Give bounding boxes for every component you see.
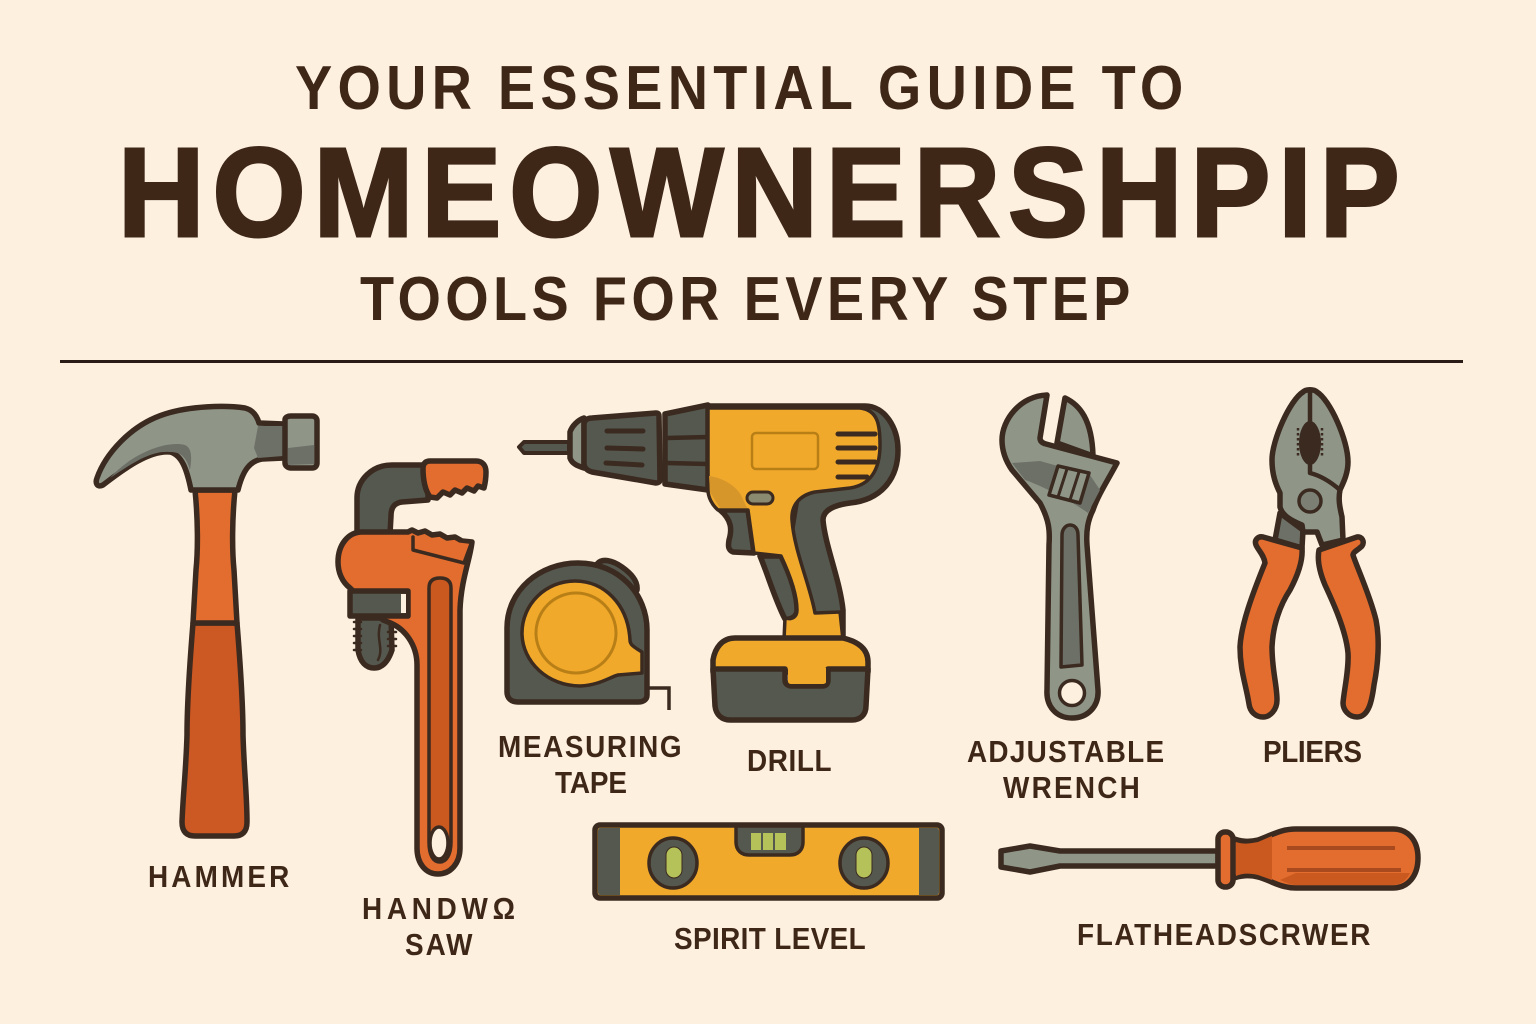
hammer head xyxy=(96,406,284,490)
icon: cordless drill xyxy=(519,405,898,720)
handle hole xyxy=(430,827,448,859)
icon: hammer xyxy=(96,406,317,836)
label line two: WRENCH xyxy=(1003,771,1140,805)
chuck nose xyxy=(570,418,584,468)
drill rear housing and grip xyxy=(708,406,898,640)
screwdriver shaft xyxy=(1001,846,1218,872)
chuck xyxy=(584,413,660,483)
heading: homeownershpip: HOMEOWNERSHPIP xyxy=(118,123,1400,264)
label: adjustable wrench xyxy=(967,735,1164,805)
hammer lower grip xyxy=(182,623,247,836)
drill vents xyxy=(838,434,875,477)
tape case xyxy=(507,563,647,702)
battery base xyxy=(713,669,868,720)
icon: spirit level xyxy=(595,825,942,898)
screwdriver grip lines xyxy=(1287,848,1401,870)
wrench body xyxy=(338,530,472,874)
level left vial xyxy=(649,838,697,888)
screwdriver handle xyxy=(1232,829,1418,888)
icon: pipe wrench xyxy=(338,461,486,874)
label: measuring tape xyxy=(498,730,682,800)
title xyxy=(118,54,1400,334)
label line one: HANDWΩ xyxy=(362,892,515,926)
tape yellow face xyxy=(522,581,642,686)
upper jaw teeth xyxy=(423,461,486,498)
drill button xyxy=(747,492,773,504)
tape hook xyxy=(647,688,669,710)
icon: measuring tape xyxy=(507,560,669,710)
label line two: SAW xyxy=(405,928,473,962)
label: pliers: PLIERS xyxy=(1263,735,1362,769)
level centre vial xyxy=(751,833,786,850)
hammer upper grip xyxy=(193,490,237,623)
level body xyxy=(595,825,942,898)
wrench end hole xyxy=(1060,680,1084,706)
icon: adjustable wrench xyxy=(1002,395,1117,718)
drill bit xyxy=(519,442,569,453)
drill label plate xyxy=(752,433,818,469)
pliers jaw slit xyxy=(1310,392,1340,490)
label line two: TAPE xyxy=(555,766,627,800)
wrench main body xyxy=(1002,395,1117,718)
subheading: tools for every step: TOOLS FOR EVERY STEP xyxy=(360,265,1130,334)
label: drill: DRILL xyxy=(747,744,832,778)
label: handwo saw xyxy=(362,892,515,962)
hammer face xyxy=(285,416,317,468)
wrench knurl xyxy=(1049,466,1089,503)
adjusting nut worm xyxy=(358,618,392,668)
label: hammer: HAMMER xyxy=(148,860,289,894)
icon: pliers xyxy=(1240,390,1378,717)
level right vial xyxy=(840,838,888,888)
label line one: MEASURING xyxy=(498,730,682,764)
icon: flathead screwdriver xyxy=(1001,829,1418,888)
wrench handle slot xyxy=(1061,525,1082,667)
pliers pivot xyxy=(1299,490,1321,512)
level left cap xyxy=(598,828,620,895)
label: flathead screwdriver: FLATHEADSCRWER xyxy=(1077,918,1370,952)
drill shade xyxy=(709,476,747,508)
tape button xyxy=(597,560,637,590)
level top notch xyxy=(736,826,803,855)
right handle xyxy=(1318,537,1378,717)
pliers serrated grip xyxy=(1298,421,1322,465)
screwdriver collar xyxy=(1218,832,1233,887)
drill yellow body xyxy=(708,408,880,640)
movable jaw wedge xyxy=(413,537,471,563)
drill collar xyxy=(665,405,708,490)
heading: your essential guide to: YOUR ESSENTIAL GUIDE TO xyxy=(295,54,1183,123)
tape inner ring xyxy=(536,593,616,673)
drill trigger xyxy=(720,510,754,553)
label line one: ADJUSTABLE xyxy=(967,735,1164,769)
wrench moving jaw xyxy=(1057,398,1093,456)
handle slot xyxy=(429,578,451,862)
wrench head shade xyxy=(1012,461,1100,513)
pliers head xyxy=(1272,390,1348,545)
sliding block xyxy=(350,591,408,616)
drill front grip xyxy=(760,556,797,619)
label: spirit level: SPIRIT LEVEL xyxy=(674,922,866,956)
left handle xyxy=(1240,537,1302,717)
upper jaw arm xyxy=(357,465,428,534)
battery top xyxy=(713,638,868,672)
level right cap xyxy=(919,828,939,895)
screwdriver handle shade xyxy=(1236,836,1410,885)
left lower shank xyxy=(1275,513,1303,548)
